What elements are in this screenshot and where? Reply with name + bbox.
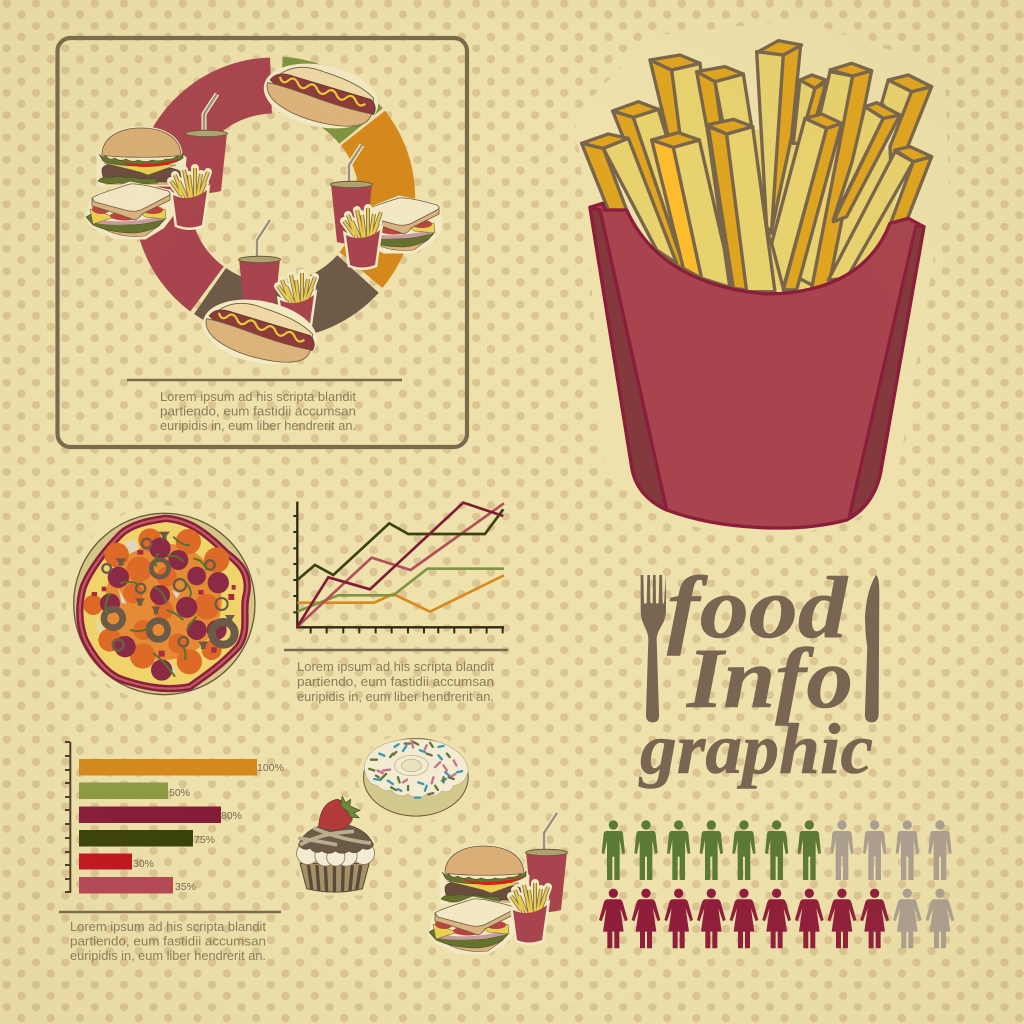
series: pink [297,503,504,627]
bar 75% [79,830,193,846]
panel: food ring chart [58,38,467,447]
text block [160,390,357,433]
halo [590,35,935,520]
line chart text: Lorem ipsum ad his scripta blandit [297,660,495,674]
icon: cupcake [295,794,377,896]
line chart text: euripidis in, eum liber hendrerit an. [297,690,494,704]
icon: drink [526,813,568,912]
series: dark green [297,509,503,580]
pictogram: women row [599,889,954,948]
bar labels: 100% [257,762,284,774]
icon: drink right [330,145,372,244]
panel frame [58,38,467,447]
icon: sandwich [86,183,172,238]
bar chart [65,742,284,894]
icon: fries [511,883,548,942]
bar 50% [79,782,168,799]
bar 30% [79,854,132,870]
icon: drink [186,94,228,193]
bar chart text [70,920,267,963]
series: green [297,569,504,612]
series: orange [297,575,504,612]
line chart text: partiendo, eum fastidii accumsan [297,675,494,689]
icon: fries right [344,208,381,268]
bar 100% [79,759,257,776]
title: food info graphic [638,560,879,789]
food group bottom [429,813,568,953]
line chart text [297,660,495,704]
line chart [293,502,504,633]
bar labels: 50% [169,787,190,799]
series: crimson [297,503,503,627]
icon: pizza [66,506,263,702]
bar 35% [79,877,173,894]
pictogram: men row [602,820,952,880]
divider [127,379,402,381]
title: food info graphic: Info [686,630,853,726]
divider under line chart [284,649,508,651]
icon: knife [865,575,879,722]
bar chart text: partiendo, eum fastidii accumsan [70,934,266,948]
icon: sandwich right [355,197,441,252]
bar labels: 35% [175,881,196,893]
bar chart text: Lorem ipsum ad his scripta blandit [70,920,267,934]
bar chart text: euripidis in, eum liber hendrerit an. [70,949,266,963]
ring chart [162,85,387,311]
bar labels: 80% [221,810,242,822]
box [590,203,924,528]
icon: sandwich [429,898,515,953]
big fries box [582,35,935,528]
icon: burger [441,846,528,903]
icon: fork [641,575,666,722]
text block: euripidis in, eum liber hendrerit an. [160,419,356,433]
bar labels: 75% [194,834,215,846]
chart axes [297,502,504,627]
icon: burger [98,128,185,185]
text block: partiendo, eum fastidii accumsan [160,404,356,418]
icon: hot dog bottom [197,291,323,373]
title: food info graphic: graphic [638,709,873,789]
title text: food [667,560,849,657]
bar 80% [79,806,221,823]
bar axis [65,742,70,893]
divider under bar chart [59,911,281,913]
icon: hot dog [258,55,384,137]
bar labels: 30% [133,858,154,870]
icon: fries [171,168,208,228]
icon: drink bottom [238,220,280,319]
icon: donut [358,733,474,822]
text block: Lorem ipsum ad his scripta blandit [160,390,357,404]
fries [582,41,932,292]
icon: fries bottom [278,273,315,332]
